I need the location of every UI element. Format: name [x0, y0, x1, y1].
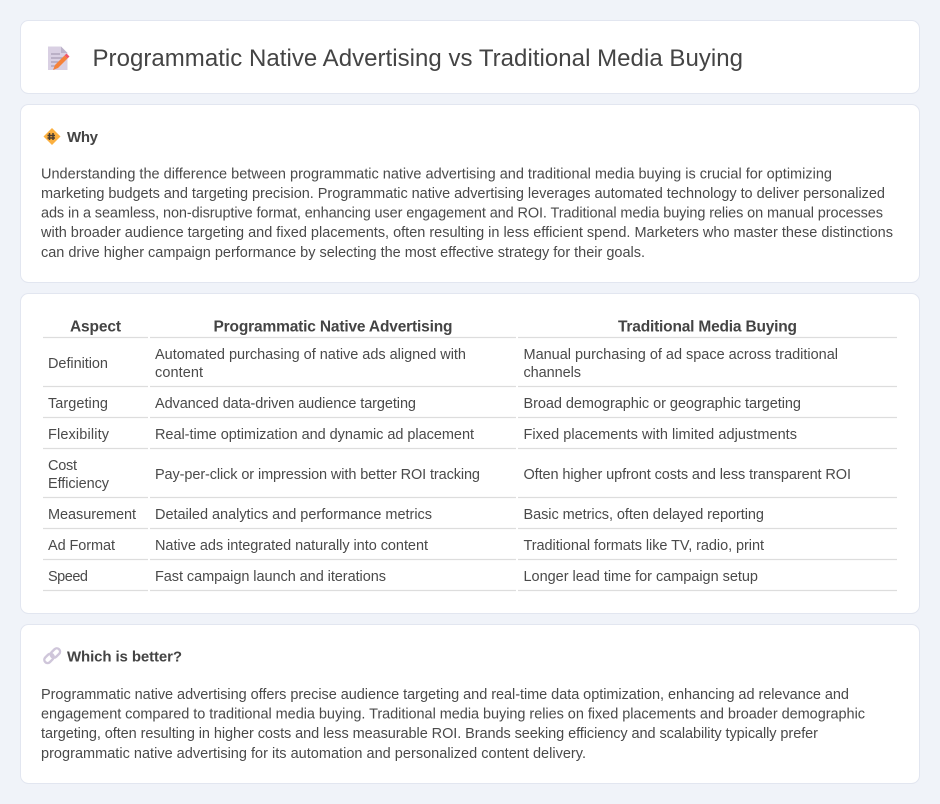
icon: chain link: [43, 647, 61, 664]
row: speed: Speed: [48, 569, 88, 585]
row: ad format: Native ads integrated naturally into content: [155, 538, 428, 554]
text block: which is better paragraph: programmatic native advertising for its automation and personalized content delivery.: [41, 746, 586, 762]
icon: orange diamond sign: [44, 128, 60, 145]
row: flexibility: [48, 427, 797, 443]
text block: which is better paragraph: [41, 687, 865, 762]
panel: which is better: [20, 624, 920, 784]
row: ad format: Ad Format: [48, 538, 115, 554]
row: cost efficiency: Efficiency: [48, 476, 110, 492]
row: cost efficiency: Cost: [48, 458, 77, 474]
text block: why paragraph: Understanding the difference between programmatic native advertising and traditional media buying is crucial for optimizing: [41, 166, 832, 182]
row: targeting: Targeting: [48, 396, 108, 412]
row: flexibility: Flexibility: [48, 427, 110, 443]
row: measurement: Basic metrics, often delayed reporting: [524, 507, 764, 523]
row: flexibility: Fixed placements with limited adjustments: [524, 427, 797, 443]
row: targeting: [48, 396, 801, 412]
table header: [70, 318, 797, 336]
icon: document with pencil: [48, 46, 70, 70]
row: targeting: Advanced data-driven audience targeting: [155, 396, 416, 412]
text block: why paragraph: [40, 166, 893, 261]
table header: Programmatic Native Advertising: [214, 318, 452, 336]
text block: why paragraph: can drive higher campaign performance by selecting the most effective strategy for their goals.: [41, 245, 645, 261]
text block: why paragraph: ads in a seamless, non-disruptive format, enhancing user engagement and ROI. Traditional media buying relies on manual processes: [41, 206, 883, 222]
text block: which is better paragraph: targeting, often resulting in higher costs and less measurable ROI. Brands seeking efficiency and scalability typically prefer: [41, 726, 818, 742]
row: definition: channels: [524, 365, 581, 381]
row: definition: Definition: [48, 356, 108, 372]
row: definition: Manual purchasing of ad space across traditional: [524, 347, 838, 363]
title: Programmatic Native Advertising vs Traditional Media Buying: [92, 45, 743, 72]
panel: comparison table: [20, 294, 920, 614]
row: ad format: [48, 538, 764, 554]
panel: why: [20, 104, 920, 282]
row: cost efficiency: Pay-per-click or impression with better ROI tracking: [155, 467, 480, 483]
heading: why: Why: [67, 129, 99, 146]
text block: why paragraph: with broader audience targeting and fixed placements, often resulting in less efficient spend. Marketers who master these distinctions: [40, 225, 893, 241]
row: cost efficiency: [48, 458, 851, 492]
row: speed: Fast campaign launch and iterations: [155, 569, 386, 585]
row: definition: content: [155, 365, 203, 381]
row: ad format: Traditional formats like TV, radio, print: [524, 538, 764, 554]
panel: title header: [20, 20, 920, 94]
row: cost efficiency: Often higher upfront costs and less transparent ROI: [524, 467, 851, 483]
row: measurement: [48, 507, 764, 523]
table header: Aspect: [70, 318, 121, 336]
table header: Traditional Media Buying: [618, 318, 797, 336]
row: measurement: Measurement: [48, 507, 136, 523]
text block: why paragraph: marketing budgets and targeting precision. Programmatic native advertising leverages automated technology to deliver personalized: [41, 186, 885, 202]
row: definition: [48, 347, 838, 381]
row: speed: [48, 569, 758, 585]
row: speed: Longer lead time for campaign setup: [524, 569, 758, 585]
row: definition: Automated purchasing of native ads aligned with: [155, 347, 466, 363]
heading: which is better: Which is better?: [67, 649, 182, 666]
row: targeting: Broad demographic or geographic targeting: [524, 396, 801, 412]
row: measurement: Detailed analytics and performance metrics: [155, 507, 432, 523]
text block: which is better paragraph: Programmatic native advertising offers precise audience targeting and real-time data optimization, enhancing ad relevance and: [41, 687, 849, 703]
text block: which is better paragraph: engagement compared to traditional media buying. Traditional media buying relies on fixed placements and broader demographic: [41, 707, 865, 723]
row: flexibility: Real-time optimization and dynamic ad placement: [155, 427, 474, 443]
